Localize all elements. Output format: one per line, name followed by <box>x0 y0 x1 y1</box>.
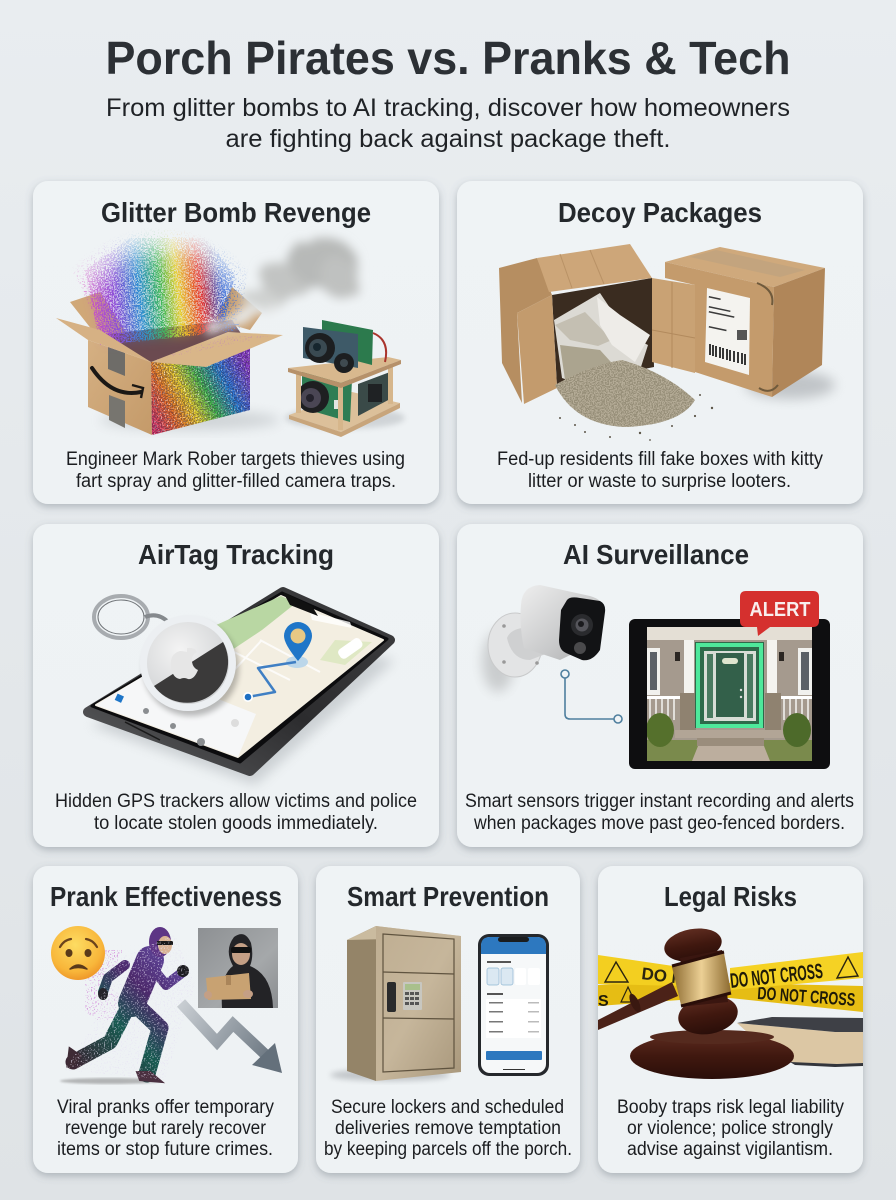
description: Fed-up residents fill fake boxes with kitty <box>497 449 823 470</box>
description: litter or waste to surprise looters. <box>528 471 791 492</box>
icon: downward trend arrow <box>181 1003 282 1073</box>
illustration: airtag and key ring <box>94 596 239 716</box>
heading: decoy packages: Decoy Packages <box>558 197 762 228</box>
description: Viral pranks offer temporary <box>57 1097 274 1118</box>
illustration: caution tape: DO N <box>641 964 685 988</box>
illustration: phone with map <box>88 592 395 785</box>
illustration: parcel locker <box>330 926 461 1081</box>
panel: smart prevention <box>316 866 580 1173</box>
panel: legal risks <box>598 866 863 1173</box>
illustration: tablet with porch feed <box>629 619 830 769</box>
description <box>57 1097 274 1160</box>
description <box>465 791 854 834</box>
heading: ai surveillance: AI Surveillance <box>563 539 749 570</box>
icon: worried face <box>51 926 105 980</box>
illustration: exploding rainbow glitter box <box>55 224 283 435</box>
photo: hooded thief with package <box>198 928 278 1008</box>
illustration: camera trap rig <box>285 320 405 437</box>
description: Secure lockers and scheduled <box>331 1097 564 1118</box>
heading: legal risks: Legal Risks <box>664 881 797 912</box>
illustration: caution tape: DO NOT CROSS <box>729 960 824 993</box>
title: Porch Pirates vs. Pranks & Tech <box>106 32 790 84</box>
illustration: law book <box>737 1017 863 1067</box>
illustration: sealed box with shipping label <box>665 247 835 399</box>
description: when packages move past geo-fenced borders. <box>473 813 845 834</box>
illustration: judge's gavel <box>598 924 794 1079</box>
illustration: security camera <box>482 585 605 692</box>
description: revenge but rarely recover <box>65 1118 267 1139</box>
illustration: glitter-covered running thief <box>60 927 195 1084</box>
illustration: caution tape: S <box>598 993 609 1010</box>
description: fart spray and glitter-filled camera traps. <box>76 471 396 492</box>
description <box>617 1097 844 1160</box>
heading: airtag tracking: AirTag Tracking <box>138 539 334 570</box>
heading: prank effectiveness: Prank Effectiveness <box>50 881 282 912</box>
description: or violence; police strongly <box>627 1118 833 1139</box>
description: Engineer Mark Rober targets thieves using <box>66 449 405 470</box>
panel: ai surveillance <box>457 524 863 847</box>
description: to locate stolen goods immediately. <box>94 813 378 834</box>
subtitle <box>106 94 790 153</box>
illustration: caution tape: DO NOT CROSS <box>757 983 856 1010</box>
description: advise against vigilantism. <box>627 1139 833 1160</box>
heading: glitter bomb revenge: Glitter Bomb Revenge <box>101 197 371 228</box>
illustration: open box spilling kitty litter <box>499 244 713 441</box>
description: Hidden GPS trackers allow victims and police <box>55 791 417 812</box>
description <box>66 449 405 492</box>
alert badge <box>740 591 819 636</box>
subtitle: From glitter bombs to AI tracking, discover how homeowners <box>106 94 790 122</box>
description <box>55 791 417 834</box>
description <box>497 449 823 492</box>
panel: decoy packages <box>457 181 863 504</box>
panel: prank effectiveness <box>33 866 298 1173</box>
illustration: smoke cloud <box>205 237 360 334</box>
alert badge: ALERT <box>750 599 810 621</box>
panel: airtag tracking <box>33 524 439 847</box>
illustration: caution tape <box>598 952 863 1012</box>
description: Booby traps risk legal liability <box>617 1097 844 1118</box>
connector line <box>561 670 622 723</box>
illustration: delivery scheduling phone <box>478 934 549 1076</box>
description: Smart sensors trigger instant recording and alerts <box>465 791 854 812</box>
description: deliveries remove temptation <box>335 1118 561 1139</box>
subtitle: are fighting back against package theft. <box>226 125 670 153</box>
description: items or stop future crimes. <box>57 1139 273 1160</box>
panel: glitter bomb revenge <box>33 181 439 504</box>
heading: smart prevention: Smart Prevention <box>347 881 549 912</box>
description <box>324 1097 572 1160</box>
description: by keeping parcels off the porch. <box>324 1139 572 1160</box>
